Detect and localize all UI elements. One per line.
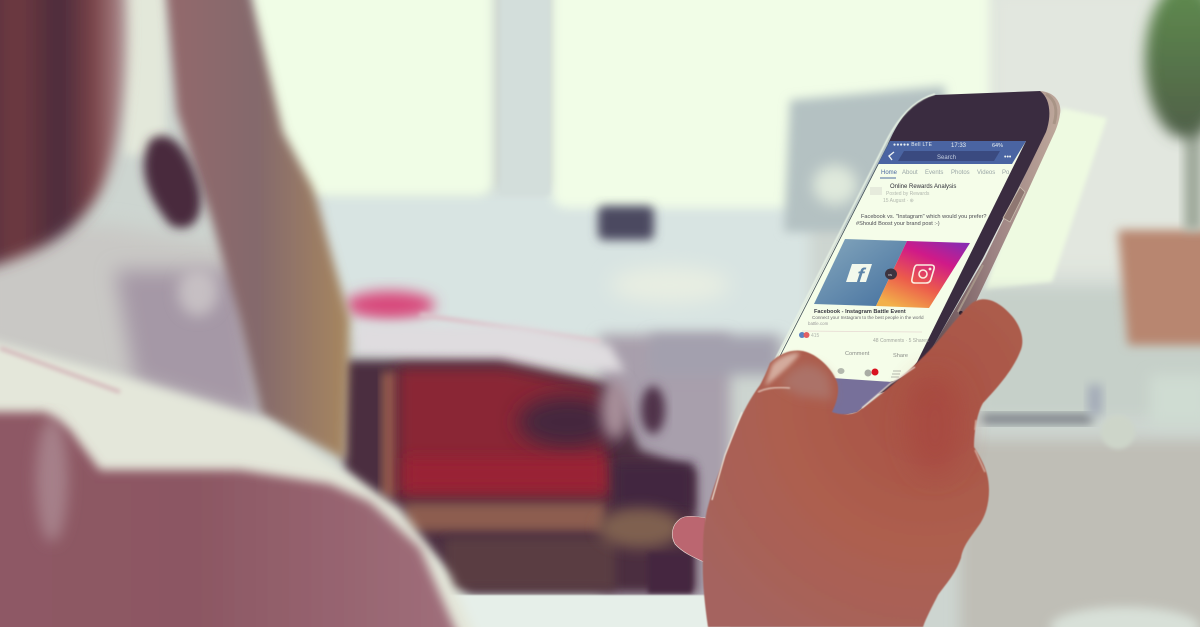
- post header: [870, 184, 956, 204]
- post copy: [856, 214, 987, 227]
- vs badge: vs: [888, 272, 892, 277]
- mauve band beside index finger: [650, 335, 780, 375]
- reactions row: [799, 332, 929, 344]
- mauve vase: [601, 380, 629, 440]
- right mid wall: [980, 290, 1200, 415]
- tab posts: Po: [1002, 170, 1010, 176]
- page tabs: [881, 170, 1010, 176]
- plant pot: [1118, 230, 1200, 345]
- comment count: 48 Comments · 5 Shares: [873, 338, 929, 344]
- facebook vs instagram image: [814, 239, 970, 308]
- link caption: [808, 309, 924, 326]
- pale wall between hair and arm: [124, 0, 166, 155]
- dark stem: [641, 386, 665, 434]
- tab home: Home: [881, 170, 898, 176]
- menu icon: [891, 371, 901, 377]
- side button: [958, 265, 983, 312]
- facebook icon: f: [853, 264, 868, 287]
- instagram icon: [912, 265, 934, 283]
- mauve wall behind the hand: [600, 335, 730, 600]
- caption body: Connect your Instagram to the best people in the world: [812, 315, 924, 320]
- person: shoulder, arm and hair: [0, 0, 478, 627]
- divider under link: [802, 331, 922, 332]
- page name: Online Rewards Analysis: [890, 184, 956, 190]
- monitor glow: [813, 165, 857, 205]
- tan shelf: [405, 503, 605, 531]
- more dots: •••: [1004, 154, 1012, 161]
- low dark shelf: [445, 538, 615, 590]
- tan stripe: [382, 372, 396, 497]
- back arrow: [889, 152, 894, 160]
- brown patch: [598, 508, 682, 548]
- phone speaker hole: [959, 311, 963, 315]
- bottom tabs: [838, 368, 901, 377]
- plant stem: [1184, 120, 1200, 230]
- dark block: [615, 463, 693, 511]
- shirt light shoulder: [0, 338, 478, 627]
- little finger: [672, 516, 706, 562]
- shirt left fold: [36, 418, 68, 542]
- facebook icon: [846, 264, 872, 287]
- caption url: battle.com: [808, 321, 829, 326]
- left window: [249, 0, 493, 196]
- signal text: ●●●●● Bell LTE: [893, 142, 933, 148]
- volume buttons: [1003, 187, 1025, 222]
- notification globe: [864, 370, 872, 376]
- highlight on the top corner: [1046, 94, 1056, 124]
- dark line on the right cabinet: [982, 414, 1092, 424]
- shirt shaded body: [0, 412, 460, 627]
- bright light panel at right: [985, 108, 1107, 290]
- lower right highlight: [1050, 607, 1200, 627]
- bright red band: [405, 458, 605, 490]
- right lower wall: [960, 440, 1200, 627]
- comment button: Comment: [845, 351, 870, 357]
- dark hairline at screen left edge: [778, 141, 890, 360]
- action buttons: [845, 351, 908, 359]
- share button: Share: [893, 353, 908, 359]
- tab photos: Photos: [951, 170, 970, 176]
- window frame pillar: [500, 0, 550, 195]
- dark desk object: [598, 206, 654, 240]
- plant leaves: [1145, 0, 1200, 138]
- red cloth: [345, 291, 435, 319]
- pale block at far right: [1150, 375, 1200, 425]
- right wall: [980, 0, 1200, 280]
- caption title: Facebook - Instagram Battle Event: [814, 309, 906, 315]
- hand holding the phone: [672, 299, 1022, 627]
- search label: Search: [937, 155, 956, 161]
- knuckle highlight: [758, 387, 790, 392]
- vs badge: [885, 268, 897, 280]
- post copy first line: Facebook vs. "Instagram" which would you prefer?: [861, 214, 987, 220]
- tab events: Events: [925, 170, 943, 176]
- like count: 415: [811, 333, 820, 339]
- area under the left window: [320, 190, 810, 340]
- floor highlight: [440, 595, 730, 627]
- blue accent on the right: [1088, 385, 1102, 415]
- smartphone: [774, 91, 1060, 400]
- monitor behind the phone: [784, 86, 945, 232]
- pale ball on the right: [1101, 415, 1135, 449]
- dark centre of the red object: [518, 396, 618, 448]
- phone aluminium edge: [925, 91, 1060, 360]
- post meta: Posted by Rewards: [886, 191, 930, 197]
- tab about: About: [902, 170, 918, 176]
- pale shelf top: [355, 325, 625, 372]
- light bevel along the left edge: [774, 94, 935, 362]
- facebook panel: [814, 239, 907, 306]
- thumb edge highlight: [862, 367, 915, 408]
- time: 17:33: [951, 143, 967, 149]
- lower dark block: [648, 553, 692, 593]
- chat icon: [838, 368, 844, 374]
- page logo: [870, 187, 882, 195]
- battery: 64%: [992, 143, 1003, 149]
- pale sleeve behind hair: [0, 225, 250, 420]
- tab videos: Videos: [977, 170, 995, 176]
- mauve cloth under the arm: [115, 270, 262, 420]
- hair: [0, 0, 126, 270]
- post copy second line: #Should Boost your brand post :-): [856, 221, 940, 227]
- centre window: [552, 0, 990, 208]
- knuckle glint: [975, 420, 985, 472]
- red object: [398, 368, 610, 498]
- pale patch on the cloth: [178, 268, 218, 316]
- status bar: [893, 142, 1003, 149]
- screen page background: [775, 141, 1026, 382]
- like reaction: [799, 332, 805, 338]
- post date: 15 August · ⊕: [883, 198, 914, 204]
- phone dark body: [860, 91, 1050, 400]
- shirt pink crease: [0, 348, 120, 392]
- palm: [703, 299, 1022, 627]
- pink strip fading right: [420, 315, 600, 342]
- purple shadow under the phone: [830, 378, 892, 418]
- dark furniture: [344, 360, 696, 593]
- facebook blue header: [878, 141, 1026, 164]
- left rim light: [712, 412, 742, 500]
- active tab underline: [880, 177, 896, 179]
- love reaction: [804, 332, 810, 338]
- index finger upper tone: [780, 364, 833, 400]
- index fingertip highlight: [765, 353, 800, 386]
- notification badge: [872, 368, 878, 376]
- pale desk highlight: [610, 267, 730, 303]
- raised arm: [165, 0, 350, 460]
- red shadow near the wrist bone: [907, 375, 963, 475]
- search box: [898, 151, 1000, 161]
- instagram panel: [876, 241, 970, 308]
- dark patch beside the arm: [144, 136, 201, 228]
- screen: [775, 141, 1026, 382]
